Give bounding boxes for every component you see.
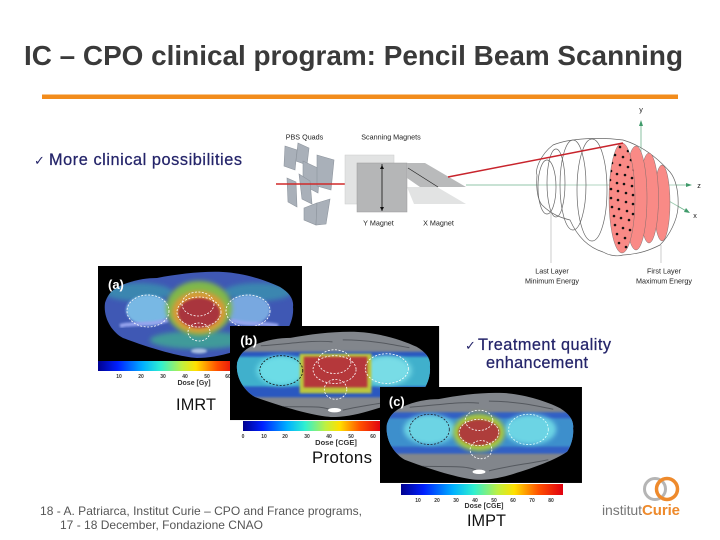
tick labels b: 20 — [282, 434, 288, 440]
diagram labels — [286, 105, 701, 286]
tick labels a: 60 — [225, 374, 231, 380]
diagram labels: X Magnet — [423, 218, 454, 228]
PBS quadrupole magnets — [284, 143, 334, 225]
check mark: ✓ — [465, 339, 476, 354]
panel b: protons dose map — [230, 326, 439, 420]
tick labels a: 20 — [138, 374, 144, 380]
colour bar c — [401, 484, 563, 510]
diagram labels: Y Magnet — [363, 218, 394, 228]
layer leader lines — [551, 212, 661, 263]
tick labels c: 60 — [510, 498, 516, 504]
tick labels b: Dose [CGE] — [315, 438, 357, 447]
bullet line one: Treatment quality — [478, 336, 612, 354]
footer citation: 17 - 18 December, Fondazione CNAO — [60, 518, 263, 532]
tick labels b: 30 — [304, 434, 310, 440]
tick labels a: Dose [Gy] — [177, 380, 211, 387]
panel a: IMRT dose map — [98, 266, 302, 361]
target volume outline — [537, 138, 678, 256]
diagram labels: Maximum Energy — [636, 276, 692, 286]
footer citation — [40, 504, 362, 532]
diagram labels: z — [697, 181, 701, 190]
tick labels c: 40 — [472, 498, 478, 504]
tick labels c: 20 — [434, 498, 440, 504]
energy layers: filled — [609, 143, 670, 253]
diagram labels: PBS Quads — [286, 132, 324, 142]
scanning magnets — [345, 155, 466, 212]
tick labels b: 40 — [326, 434, 332, 440]
logo: institut Curie — [602, 478, 680, 519]
label: IMPT: IMPT — [467, 512, 506, 530]
axes — [466, 120, 692, 213]
diagram labels: Last Layer — [535, 266, 569, 276]
tick labels b: 0 — [242, 434, 245, 440]
footer citation: 18 - A. Patriarca, Institut Curie – CPO and France programs, — [40, 504, 362, 518]
title: IC – CPO clinical program: Pencil Beam Scanning — [24, 40, 683, 71]
tick labels c: 80 — [548, 498, 554, 504]
scan spots — [609, 146, 635, 248]
tick labels b — [242, 434, 376, 447]
logo wordmark: institut — [602, 502, 642, 518]
tick labels c: 50 — [491, 498, 497, 504]
tick labels a: 10 — [116, 374, 122, 380]
tick labels a: 40 — [182, 374, 188, 380]
panel label: (a) — [108, 277, 124, 292]
bullet line two: enhancement — [486, 354, 588, 372]
tick labels c: 30 — [453, 498, 459, 504]
tick labels b: 50 — [348, 434, 354, 440]
tick labels a — [116, 374, 231, 387]
tick labels b: 60 — [370, 434, 376, 440]
diagram labels: y — [639, 105, 643, 114]
tick labels c: 10 — [415, 498, 421, 504]
diagram labels: Scanning Magnets — [361, 132, 421, 142]
contours — [260, 350, 408, 399]
energy layers: outlined — [538, 139, 607, 241]
colour bar a — [98, 361, 238, 387]
pencil beam scanning diagram — [276, 105, 701, 286]
body and dose wash — [104, 272, 294, 358]
tick labels c: Dose [CGE] — [465, 503, 503, 510]
tick labels c — [415, 498, 554, 510]
check mark: ✓ — [34, 154, 45, 169]
logo rings — [644, 478, 666, 500]
panel label: (c) — [389, 394, 405, 409]
label: IMRT: IMRT — [176, 396, 216, 414]
panel label: (b) — [240, 333, 257, 348]
tick labels a: 30 — [160, 374, 166, 380]
diagram labels: First Layer — [647, 266, 682, 276]
label: Protons: Protons — [312, 448, 372, 467]
tick labels a: 50 — [204, 374, 210, 380]
diagram labels: Minimum Energy — [525, 276, 579, 286]
panel c: IMPT dose map — [380, 387, 582, 483]
scanned beam line — [448, 143, 623, 177]
body and dose band — [386, 392, 574, 480]
diagram labels: x — [693, 211, 697, 220]
body and dose band — [236, 332, 430, 417]
incoming beam line — [276, 183, 358, 185]
contours — [127, 292, 270, 341]
bullet: more clinical possibilities — [34, 151, 242, 169]
contours — [410, 410, 548, 459]
logo: institut Curie: Curie — [642, 502, 680, 519]
bullet: treatment quality enhancement — [465, 336, 612, 372]
tick labels b: 10 — [261, 434, 267, 440]
bullet text: More clinical possibilities — [49, 151, 242, 169]
colour bar b — [242, 421, 381, 447]
tick labels c: 70 — [529, 498, 535, 504]
orange title rule — [42, 94, 678, 99]
